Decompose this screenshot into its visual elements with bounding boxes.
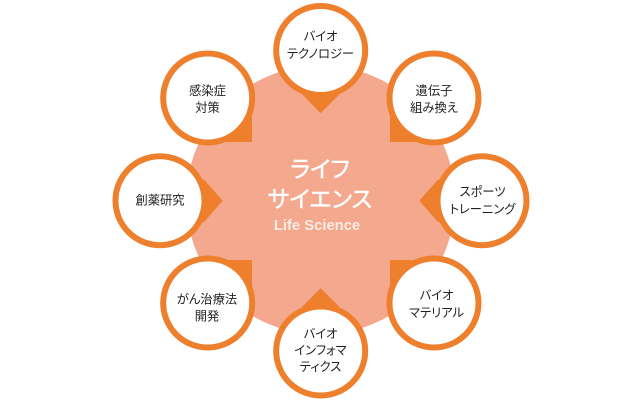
node: bioinformatics <box>276 288 365 396</box>
node: gene recombination: 組み換え <box>410 101 458 115</box>
node: cancer treatment development: 開発 <box>195 310 219 324</box>
node: biomaterial: バイオ <box>419 288 454 302</box>
node: biotechnology <box>276 6 365 113</box>
node: cancer treatment development: がん治療法 <box>177 292 237 306</box>
node: gene recombination <box>390 54 478 142</box>
node: infectious disease control: 感染症 <box>189 83 226 98</box>
central title: ライフ <box>290 156 350 182</box>
node: bioinformatics: ティクス <box>300 360 342 374</box>
node: sports training: スポーツ <box>459 185 506 199</box>
node: infectious disease control: 対策 <box>195 100 220 115</box>
node: drug discovery <box>116 156 223 245</box>
node: bioinformatics: バイオ <box>303 327 338 341</box>
central title <box>268 156 372 234</box>
node: biomaterial <box>390 258 478 348</box>
central title: Life Science <box>274 218 360 234</box>
node: bioinformatics: インフォマ <box>294 344 347 358</box>
central circle <box>186 66 455 334</box>
node: biotechnology: テクノロジー <box>287 47 354 61</box>
node: biomaterial: マテリアル <box>409 306 464 320</box>
central title: サイエンス <box>268 186 372 212</box>
node: infectious disease control <box>163 54 252 142</box>
node: biotechnology: バイオ <box>303 30 338 44</box>
node: drug discovery: 創薬研究 <box>135 194 185 208</box>
node: gene recombination: 遺伝子 <box>416 83 452 98</box>
node: cancer treatment development <box>163 258 252 348</box>
node: sports training: トレーニング <box>450 202 516 216</box>
node: sports training <box>419 156 526 245</box>
